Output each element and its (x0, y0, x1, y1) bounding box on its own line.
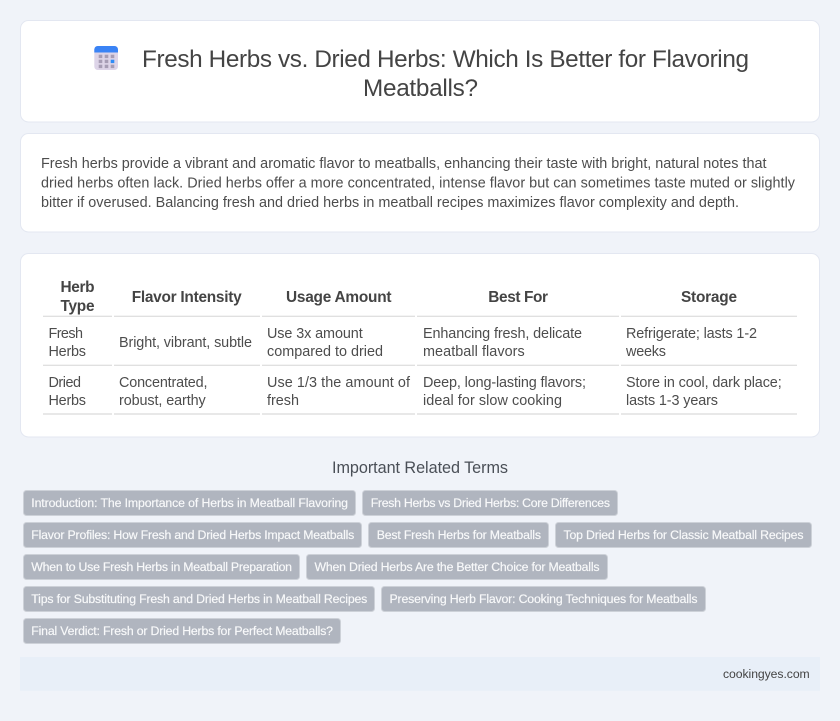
tag: top dried herbs (556, 522, 812, 548)
heading: important related terms: Important Related Terms (332, 459, 508, 477)
tag: preserving flavor: Preserving Herb Flavor: Cooking Techniques for Meatballs (390, 592, 698, 606)
tag: flavor profiles: Flavor Profiles: How Fresh and Dried Herbs Impact Meatballs (31, 528, 354, 542)
intro paragraph: bitter if overused. Balancing fresh and dried herbs in meatball recipes maximizes flavor complexity and depth. (41, 195, 739, 211)
table row: fresh herbs: compared to dried (267, 344, 383, 360)
tag: final verdict (24, 618, 340, 644)
tag: when dried is better (306, 554, 608, 580)
tag: introduction: Introduction: The Importance of Herbs in Meatball Flavoring (31, 496, 348, 510)
table header row: Type (60, 298, 95, 315)
table row: fresh herbs: Enhancing fresh, delicate (423, 326, 582, 342)
tag: best fresh herbs (368, 522, 548, 548)
table header row: Best For (488, 289, 548, 306)
table row: fresh herbs: Refrigerate; lasts 1-2 (626, 326, 757, 342)
tag: when to use fresh: When to Use Fresh Herbs in Meatball Preparation (31, 560, 292, 574)
tag: introduction (24, 490, 356, 516)
tag: when to use fresh (24, 554, 300, 580)
table row: dried herbs (48, 375, 782, 409)
panel: title header (20, 20, 820, 122)
panel: related term tags (24, 490, 812, 644)
table header row (60, 279, 737, 315)
title: Fresh Herbs vs. Dried Herbs: Which Is Better for Flavoring (142, 46, 749, 73)
panel: intro text (20, 134, 820, 232)
tag: core differences: Fresh Herbs vs Dried Herbs: Core Differences (371, 496, 610, 510)
icon: calendar (94, 46, 118, 70)
tag: final verdict: Final Verdict: Fresh or Dried Herbs for Perfect Meatballs? (31, 624, 333, 638)
tag: flavor profiles (24, 522, 362, 548)
tag: when dried is better: When Dried Herbs Are the Better Choice for Meatballs (314, 560, 600, 574)
table row: dried herbs: Store in cool, dark place; (626, 375, 782, 391)
title: Meatballs? (363, 75, 478, 102)
intro paragraph: Fresh herbs provide a vibrant and aromatic flavor to meatballs, enhancing their taste with bright, natural notes that (41, 156, 766, 172)
tag: substitution tips (24, 586, 374, 612)
title (142, 46, 749, 102)
tag: top dried herbs: Top Dried Herbs for Classic Meatball Recipes (564, 528, 804, 542)
table row: fresh herbs: weeks (625, 344, 666, 360)
table header row: Usage Amount (286, 289, 392, 306)
table row: fresh herbs: Fresh (48, 326, 83, 342)
table row: dried herbs: Deep, long-lasting flavors; (423, 375, 586, 391)
table row: dried herbs: robust, earthy (119, 393, 206, 409)
table row: dried herbs: fresh (267, 393, 299, 409)
table header row: Flavor Intensity (132, 289, 242, 306)
table row: dried herbs: Use 1/3 the amount of (267, 375, 411, 391)
footer bar (20, 657, 820, 691)
panel: comparison table (20, 254, 820, 437)
table row: fresh herbs (48, 326, 757, 360)
tag: substitution tips: Tips for Substituting Fresh and Dried Herbs in Meatball Recipes (31, 592, 367, 606)
table row: dried herbs: Dried (48, 375, 81, 391)
table row: dried herbs: lasts 1-3 years (626, 393, 718, 409)
tag: core differences (362, 490, 618, 516)
intro paragraph: dried herbs often lack. Dried herbs offer a more concentrated, intense flavor but can sometimes taste muted or slightly (41, 176, 796, 192)
table row: dried herbs: Concentrated, (119, 375, 208, 391)
table row: fresh herbs: Herbs (48, 344, 86, 360)
table row: fresh herbs: meatball flavors (423, 344, 525, 360)
intro paragraph (41, 156, 796, 211)
table row: fresh herbs: Bright, vibrant, subtle (119, 335, 252, 351)
table row: dried herbs: ideal for slow cooking (423, 393, 562, 409)
table row: dried herbs: Herbs (48, 393, 86, 409)
table row: fresh herbs: Use 3x amount (267, 326, 363, 342)
tag: preserving flavor (382, 586, 706, 612)
table header row: Herb (60, 279, 94, 296)
tag: best fresh herbs: Best Fresh Herbs for Meatballs (377, 528, 541, 542)
footer source text: cookingyes.com (723, 667, 810, 681)
table header row: Storage (681, 289, 737, 306)
